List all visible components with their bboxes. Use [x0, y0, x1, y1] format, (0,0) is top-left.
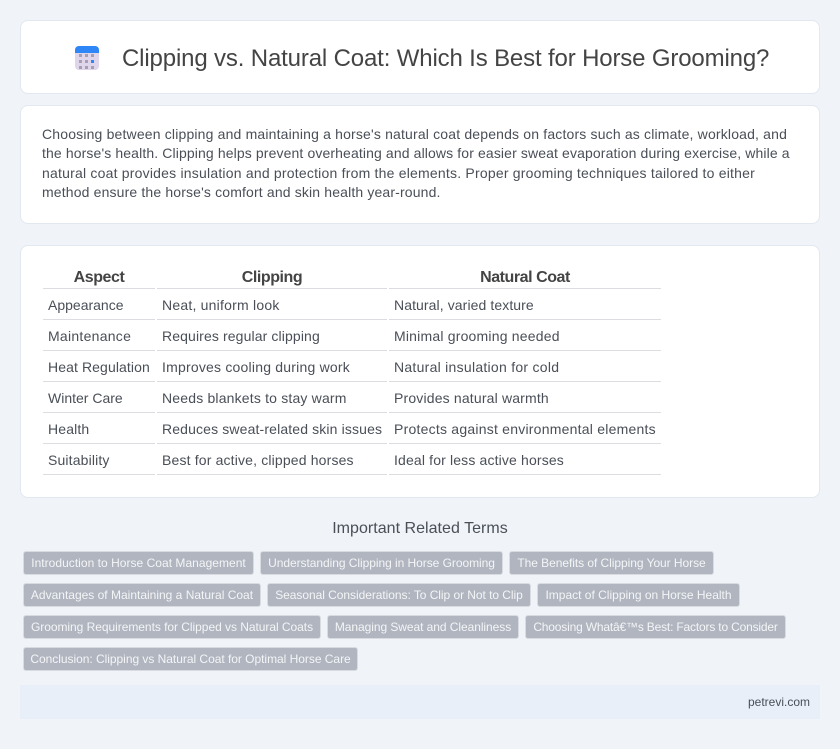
row: appearance [43, 297, 661, 320]
tag: Introduction to Horse Coat Management [31, 556, 246, 570]
row: health: Protects against environmental elements [394, 421, 656, 437]
row: heat regulation: Heat Regulation [48, 359, 150, 375]
tag [509, 551, 714, 575]
table header: Natural Coat [480, 269, 570, 286]
footer bar [20, 685, 820, 719]
tag: Conclusion: Clipping vs Natural Coat for Optimal Horse Care [30, 652, 351, 666]
row: appearance: Appearance [48, 297, 124, 313]
row: health [43, 421, 661, 444]
intro text: method ensure the horse's comfort and skin health year-round. [42, 184, 441, 200]
table header: Clipping [242, 269, 302, 286]
related terms heading: Important Related Terms [332, 520, 508, 537]
tag: Advantages of Maintaining a Natural Coat [31, 588, 253, 602]
footer source: petrevi.com [748, 695, 810, 709]
row: heat regulation: Improves cooling during work [162, 359, 350, 375]
icon: calendar [75, 46, 99, 70]
intro card [20, 105, 820, 224]
intro text: Choosing between clipping and maintaining a horse's natural coat depends on factors such as climate, workload, and [42, 126, 787, 142]
tag [23, 551, 254, 575]
row: health: Health [48, 421, 89, 437]
row: maintenance: Minimal grooming needed [394, 328, 560, 344]
tag [23, 615, 321, 639]
tag [267, 583, 531, 607]
tag: The Benefits of Clipping Your Horse [517, 556, 706, 570]
tag [23, 647, 358, 671]
row: suitability: Suitability [48, 452, 110, 468]
tag: Seasonal Considerations: To Clip or Not to Clip [275, 588, 523, 602]
row: health: Reduces sweat-related skin issues [162, 421, 382, 437]
row: appearance: Natural, varied texture [394, 297, 534, 313]
tag: Impact of Clipping on Horse Health [545, 588, 732, 602]
tag: Choosing Whatâ€™s Best: Factors to Consider [533, 620, 778, 634]
intro text: the horse's health. Clipping helps prevent overheating and allows for easier sweat evaporation during exercise, while a [42, 145, 790, 161]
row: heat regulation [43, 359, 661, 382]
row: suitability: Ideal for less active horses [394, 452, 564, 468]
comparison table [43, 269, 661, 475]
tag: Managing Sweat and Cleanliness [335, 620, 511, 634]
tag [327, 615, 519, 639]
intro text [42, 126, 790, 200]
intro text: natural coat provides insulation and protection from the elements. Proper grooming techniques tailored to either [42, 165, 755, 181]
row: suitability: Best for active, clipped horses [162, 452, 354, 468]
tag [260, 551, 503, 575]
tag [525, 615, 786, 639]
row: winter care: Winter Care [48, 390, 123, 406]
row: appearance: Neat, uniform look [162, 297, 280, 313]
row: winter care: Needs blankets to stay warm [162, 390, 347, 406]
tag [537, 583, 740, 607]
table header [43, 269, 661, 289]
row: maintenance: Maintenance [48, 328, 131, 344]
tag [23, 583, 261, 607]
tag: Understanding Clipping in Horse Grooming [268, 556, 495, 570]
header card [20, 20, 820, 94]
tag: Grooming Requirements for Clipped vs Natural Coats [31, 620, 313, 634]
related terms tags [23, 551, 786, 671]
row: winter care [43, 390, 661, 413]
title: Clipping vs. Natural Coat: Which Is Best for Horse Grooming? [122, 45, 769, 72]
table header: Aspect [74, 269, 124, 286]
row: maintenance [43, 328, 661, 351]
row: winter care: Provides natural warmth [394, 390, 549, 406]
row: maintenance: Requires regular clipping [162, 328, 320, 344]
row: suitability [43, 452, 661, 475]
row: heat regulation: Natural insulation for cold [394, 359, 559, 375]
comparison table card [20, 245, 820, 498]
